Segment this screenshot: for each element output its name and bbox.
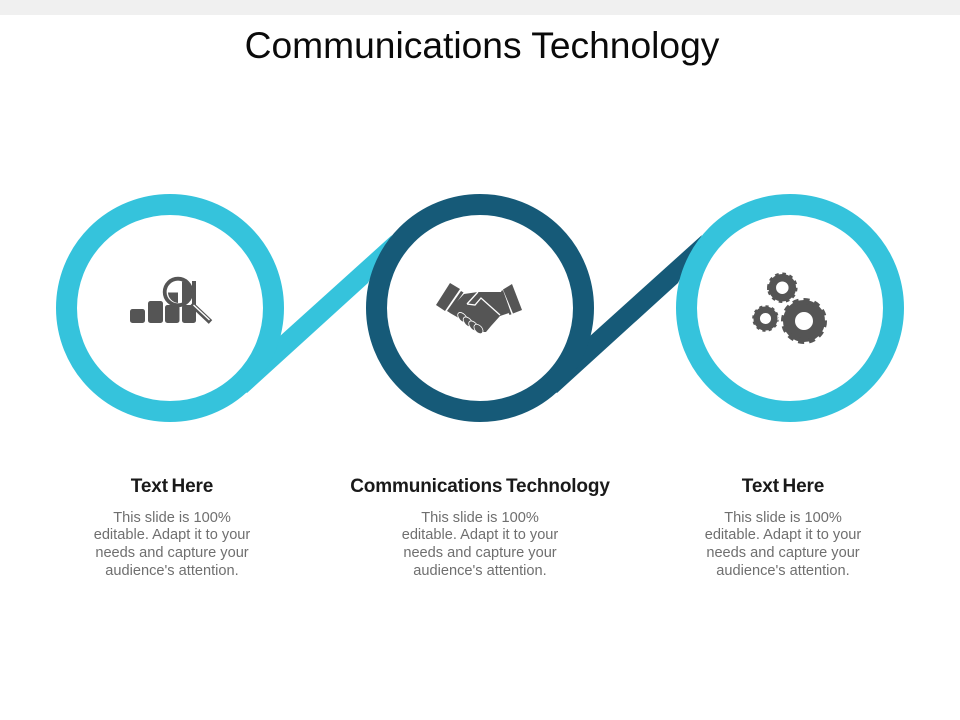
text: right: This slide is 100% (724, 510, 842, 526)
gear: top (769, 275, 795, 301)
text: centre (402, 510, 558, 579)
connector: left to centre (235, 235, 392, 393)
text: right (705, 510, 861, 579)
text: centre: needs and capture your (403, 545, 557, 561)
icon: gears (754, 275, 824, 341)
heading: right: Text Here (742, 476, 824, 497)
text: centre: audience's attention. (413, 563, 547, 579)
heading: centre: Communications Technology (350, 476, 610, 497)
ring: left (66, 204, 274, 412)
gear: large (784, 301, 824, 341)
text: left: editable. Adapt it to your (94, 527, 250, 543)
text: right: needs and capture your (706, 545, 860, 561)
gear: left (754, 307, 777, 330)
text: centre: This slide is 100% (421, 510, 539, 526)
text: left: audience's attention. (105, 563, 239, 579)
text: right: editable. Adapt it to your (705, 527, 861, 543)
ring: centre (376, 204, 584, 412)
connector: centre to right (545, 235, 702, 393)
text: left (94, 510, 250, 579)
icon: handshake (436, 283, 522, 335)
text: right: audience's attention. (716, 563, 850, 579)
heading: left: Text Here (131, 476, 213, 497)
text: centre: editable. Adapt it to your (402, 527, 558, 543)
title: Communications Technology (245, 24, 719, 66)
ring: right (686, 204, 894, 412)
text: left: This slide is 100% (113, 510, 231, 526)
icon: bar chart with magnifier (130, 279, 210, 323)
text: left: needs and capture your (95, 545, 249, 561)
